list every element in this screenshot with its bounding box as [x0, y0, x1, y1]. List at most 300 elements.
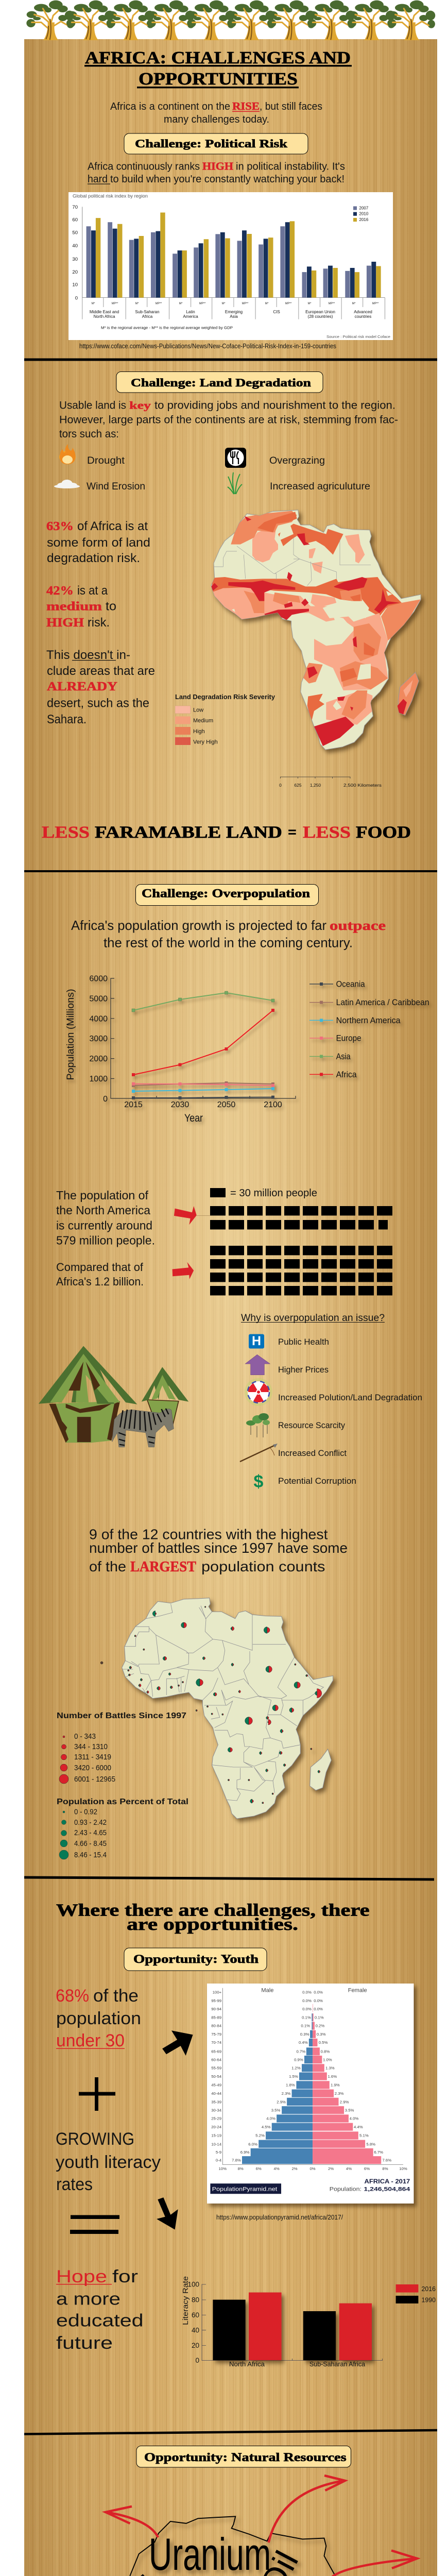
population pyramid chart: 20-24	[211, 2125, 222, 2129]
map legend: land degradation risk severity: Low	[193, 707, 203, 713]
bar chart: global political risk index: 10	[72, 282, 78, 287]
bar chart: global political risk index: MP**	[329, 302, 335, 305]
cape verde dot	[100, 1662, 103, 1664]
title	[84, 48, 352, 89]
label: wind erosion: Wind Erosion	[87, 481, 145, 492]
map scale bar: 1,250	[310, 783, 321, 788]
line chart legend: Europe	[336, 1033, 361, 1043]
population pyramid chart: 0.0%	[314, 1998, 323, 2003]
bar chart: global political risk index: M*	[352, 302, 356, 305]
population pyramid chart: 30-34	[211, 2108, 222, 2112]
political risk text: to build when you're constantly watching your back!	[110, 174, 344, 185]
population pyramid chart: 0%	[309, 2166, 316, 2171]
bar chart: global political risk index: CIS	[273, 310, 280, 314]
bar chart: global political risk index: 20	[72, 269, 78, 275]
bar chart: global political risk index: 60	[72, 217, 78, 223]
badge: opportunity youth	[124, 1948, 267, 1971]
bar chart: global political risk index: MP**	[242, 302, 249, 305]
population pyramid chart: 15-19	[211, 2133, 221, 2138]
badge: opportunity youth: Opportunity: Youth	[133, 1953, 259, 1965]
battles and population text: number of battles since 1997 have some	[89, 1540, 348, 1556]
callout: less farmable land = less food: LESS	[303, 823, 351, 842]
youth population text	[56, 1986, 141, 2050]
population pyramid chart: 75-79	[211, 2032, 221, 2037]
map legend: land degradation risk severity	[175, 693, 275, 745]
pictogram: north america population	[210, 1206, 392, 1229]
bar chart: global political risk index: 2007	[359, 206, 369, 210]
population pyramid chart: 7.6%	[382, 2158, 391, 2162]
line chart legend: Northern America	[336, 1015, 401, 1025]
bar chart: global political risk index: MP**	[199, 302, 206, 305]
population pyramid chart: 1.6%	[328, 2074, 337, 2079]
label: potential corruption: Potential Corruption	[278, 1476, 356, 1486]
battles and population text: 9 of the 12 countries with the highest	[89, 1526, 328, 1542]
population pyramid chart: 90-94	[211, 2007, 222, 2011]
political risk text: hard	[88, 174, 108, 185]
population pyramid chart: 55-59	[211, 2066, 221, 2071]
population pyramid chart: 0.0%	[302, 1998, 312, 2003]
population pyramid chart: 5.2%	[255, 2133, 265, 2138]
population pyramid chart: 1.3%	[325, 2066, 335, 2071]
map legend: land degradation risk severity: Medium	[193, 718, 213, 724]
icon: resource scarcity trees	[246, 1413, 270, 1437]
badge: challenge overpopulation: Challenge: Overpopulation	[142, 887, 310, 900]
bar chart: global political risk index: Source : Political risk model Coface	[326, 334, 390, 339]
icon: fork and knife	[225, 448, 246, 468]
plus sign	[79, 2077, 115, 2111]
line chart: population projections: 4000	[89, 1015, 108, 1023]
line chart: population projections: Population (Millions)	[65, 989, 76, 1080]
line chart legend: Latin America / Caribbean	[336, 997, 429, 1007]
zebra	[112, 1409, 174, 1447]
growing literacy text: youth literacy	[56, 2153, 161, 2172]
battles and population text: LARGEST	[130, 1559, 196, 1575]
bar chart: global political risk index: Emerging	[225, 310, 243, 314]
source url: https://www.coface.com/News-Publications/News/New-Coface-Political-Risk-Index-in-159-countries	[79, 342, 336, 350]
population pyramid chart: 35-39	[211, 2100, 221, 2105]
legend: number of battles: 6001 - 12965	[74, 1775, 115, 1784]
population pyramid chart: 1,246,504,864	[364, 2186, 410, 2192]
arrow: to africa pictogram	[173, 1262, 194, 1279]
population pyramid chart: 1.5%	[289, 2074, 298, 2079]
label: increased agriculture: Increased agriculuture	[270, 481, 370, 492]
population pyramid chart: 2%	[328, 2166, 334, 2171]
bar chart: global political risk index: countries	[355, 314, 371, 319]
growing literacy text: GROWING	[56, 2129, 134, 2149]
bar chart: global political risk index: 40	[72, 243, 78, 249]
bar chart: global political risk index: Asia	[230, 314, 238, 319]
badge: opportunity natural resources: Opportunity: Natural Resources	[144, 2451, 347, 2464]
bar chart: global political risk index: 30	[72, 257, 78, 262]
population pyramid chart: 5.8%	[366, 2142, 375, 2146]
population pyramid chart: 45-49	[211, 2083, 221, 2088]
land degradation statistics: This doesn't in-	[46, 648, 130, 662]
label: increased conflict: Increased Conflict	[278, 1448, 347, 1458]
population pyramid chart: 0.2%	[316, 2024, 324, 2028]
hope text: Hope	[56, 2267, 107, 2286]
battles and population text: population counts	[201, 1558, 325, 1574]
population pyramid chart	[207, 1984, 414, 2204]
population pyramid chart: Female	[348, 1988, 367, 1993]
section divider	[24, 870, 437, 872]
line chart: population projections: Year	[184, 1112, 203, 1124]
callout: less farmable land = less food: FARAMABLE LAND	[95, 823, 282, 842]
label: overgrazing: Overgrazing	[269, 455, 325, 466]
bar chart: global political risk index: M*	[222, 302, 226, 305]
map: land degradation risk	[210, 510, 421, 750]
population pyramid chart: 0.5%	[319, 2040, 328, 2045]
population pyramid chart: 70-74	[211, 2040, 222, 2045]
political risk text	[88, 160, 345, 185]
land degradation statistics: of Africa is at	[77, 519, 148, 533]
population comparison text: The population of	[56, 1189, 149, 1202]
bar chart: literacy rate: 100	[187, 2280, 199, 2289]
population pyramid chart: 25-29	[211, 2116, 221, 2121]
population pyramid chart: 0.1%	[315, 2015, 324, 2020]
population pyramid chart: 10%	[219, 2166, 227, 2171]
youth population text: under 30	[56, 2031, 125, 2050]
land degradation statistics: to	[106, 600, 116, 613]
population pyramid chart: 2.3%	[282, 2091, 291, 2096]
hope text	[56, 2267, 144, 2353]
line chart: population projections: 1000	[89, 1075, 108, 1083]
battles and population text	[89, 1526, 348, 1575]
bar chart: global political risk index: America	[183, 314, 198, 319]
literacy chart legend: 2016	[421, 2285, 436, 2293]
bar chart: global political risk index: Global political risk index by region	[73, 193, 148, 199]
land degradation statistics: ALREADY	[47, 680, 117, 693]
bar chart: global political risk index: Latin	[186, 310, 195, 314]
line chart: population projections: 2050	[217, 1100, 235, 1109]
population comparison text: Africa's 1.2 billion.	[56, 1275, 144, 1288]
icon: public health: H	[252, 1334, 261, 1348]
bar chart: global political risk index: M*	[265, 302, 269, 305]
bar chart: global political risk index: 0	[75, 296, 78, 301]
population pyramid chart: 6.9%	[240, 2150, 250, 2155]
population pyramid chart: 0.4%	[299, 2040, 308, 2045]
bar chart: global political risk index: MP**	[372, 302, 379, 305]
bar chart: global political risk index: 50	[72, 230, 78, 236]
bar chart: global political risk index: North Africa	[94, 314, 115, 319]
bar chart: literacy rate	[181, 2276, 382, 2368]
label: increased pollution: Increased Polution/Land Degradation	[278, 1393, 422, 1402]
heading: where there are challenges	[56, 1901, 370, 1934]
literacy chart legend: 1990	[421, 2296, 436, 2304]
population pyramid chart: 4%	[274, 2166, 280, 2171]
land degradation text: Usable land is	[59, 400, 126, 411]
line chart legend: Oceania	[336, 979, 365, 989]
badge: challenge overpopulation	[136, 884, 318, 906]
label: public health: Public Health	[278, 1337, 329, 1347]
population pyramid chart: 0.0%	[302, 1990, 312, 1995]
legend: population percent of total: 8.46 - 15.4	[74, 1851, 107, 1859]
equals sign	[70, 2215, 119, 2234]
population pyramid chart: 8%	[238, 2166, 244, 2171]
land degradation statistics: some form of land	[47, 536, 150, 550]
intro text: RISE	[232, 100, 260, 112]
illustration: huts and zebra	[39, 1346, 188, 1447]
bar chart: literacy rate: North Africa	[229, 2360, 265, 2368]
map scale bar: 0	[279, 783, 282, 788]
red arrow: northwest	[106, 2506, 158, 2537]
heading: why is overpopulation an issue: Why is overpopulation an issue?	[241, 1313, 385, 1324]
bar chart: global political risk index: M*	[135, 302, 139, 305]
bar chart: literacy rate: 80	[192, 2296, 199, 2304]
population comparison text	[56, 1189, 155, 1288]
land degradation statistics: degradation risk.	[47, 551, 140, 565]
bar chart: global political risk index: Sub-Saharan	[135, 310, 160, 314]
overpopulation text: outpace	[330, 918, 386, 933]
population pyramid chart: 3.5%	[345, 2108, 354, 2112]
population pyramid chart: 2.9%	[340, 2100, 349, 2105]
population pyramid chart: 5-9	[216, 2150, 221, 2155]
map scale bar: 625	[294, 783, 302, 788]
bar chart: literacy rate: 40	[192, 2327, 199, 2334]
population pyramid chart: 0.0%	[314, 1990, 323, 1995]
map legend: land degradation risk severity: Land Degradation Risk Severity	[175, 693, 275, 701]
bar chart: global political risk index: MP**	[285, 302, 292, 305]
population comparison text: is currently around	[56, 1218, 152, 1232]
population pyramid chart: 0-4	[216, 2158, 222, 2162]
land degradation statistics: 63%	[46, 520, 74, 533]
line chart: population projections: 2030	[171, 1100, 189, 1109]
hope text: a more	[56, 2290, 120, 2309]
population pyramid chart: 40-44	[211, 2091, 222, 2096]
population pyramid chart: 4.0%	[350, 2116, 358, 2121]
literacy chart legend	[396, 2284, 436, 2304]
population pyramid chart: 80-84	[211, 2024, 222, 2028]
population pyramid chart: 1.0%	[323, 2057, 332, 2062]
youth population text: of the	[93, 1986, 139, 2006]
title: OPPORTUNITIES	[139, 70, 298, 89]
population pyramid chart: 95-99	[211, 1998, 221, 2003]
land degradation text: However, large parts of the continents are at risk, stemming from fac-	[59, 414, 398, 426]
youth population text: population	[56, 2009, 141, 2028]
bar chart: global political risk index: M*	[308, 302, 312, 305]
population pyramid chart: 0.1%	[301, 2024, 310, 2028]
population pyramid chart: 0.7%	[297, 2049, 305, 2054]
land degradation statistics: medium	[46, 600, 102, 613]
map legend: land degradation risk severity: High	[193, 728, 205, 735]
pyramid source url: https://www.populationpyramid.net/africa/2017/	[216, 2213, 343, 2221]
battles and population text: of the	[89, 1558, 126, 1574]
population pyramid chart: AFRICA - 2017	[364, 2178, 410, 2185]
map scale bar	[279, 777, 382, 788]
line chart: population projections: 2100	[264, 1100, 282, 1109]
political risk text: Africa continuously ranks	[88, 161, 200, 172]
bar chart: global political risk index: MP**	[112, 302, 118, 305]
callout: less farmable land = less food: FOOD	[356, 823, 411, 842]
icon: grass	[228, 472, 242, 494]
population pyramid chart: Population:	[330, 2186, 361, 2192]
arrow: up right to pyramid	[162, 2030, 193, 2056]
population pyramid chart: 1.9%	[331, 2083, 340, 2088]
legend: number of battles	[57, 1711, 186, 1784]
population pyramid chart: 0.8%	[321, 2049, 330, 2054]
line chart: population projections: 0	[103, 1095, 108, 1104]
population pyramid chart: 0.0%	[302, 2007, 312, 2011]
population pyramid chart: 10-14	[211, 2142, 222, 2146]
line chart legend: Africa	[336, 1070, 357, 1079]
youth population text: 68%	[56, 1986, 89, 2006]
bar chart: global political risk index: Advanced	[354, 310, 372, 314]
population pyramid chart: 2.9%	[277, 2100, 286, 2105]
overpopulation text	[71, 918, 386, 950]
bar chart: literacy rate: Sub-Saharan Africa	[309, 2360, 366, 2368]
population pyramid chart: 10%	[399, 2166, 407, 2171]
population pyramid chart: 0.3%	[300, 2032, 309, 2037]
badge: challenge land degradation	[116, 372, 323, 393]
icon: dollar sign: $	[254, 1472, 264, 1492]
intro text: many challenges today.	[164, 114, 269, 125]
section divider	[24, 359, 437, 361]
land degradation text	[59, 399, 398, 440]
political risk text: in political instability. It's	[236, 161, 345, 172]
population pyramid chart: 0.9%	[294, 2057, 303, 2062]
bar chart: literacy rate: 20	[192, 2342, 199, 2349]
bar chart: global political risk index: 2010	[359, 211, 369, 216]
legend: population percent of total: 4.66 - 8.45	[74, 1839, 107, 1848]
pictogram: africa population	[210, 1246, 392, 1295]
population pyramid chart: 6.7%	[374, 2150, 383, 2155]
population pyramid chart: 50-54	[211, 2074, 222, 2079]
label: drought: Drought	[87, 455, 125, 466]
population pyramid chart: 8%	[382, 2166, 388, 2171]
heading: where there are challenges: Where there are challenges, there	[56, 1901, 370, 1920]
red arrow: east	[331, 2550, 417, 2576]
intro text	[110, 100, 322, 125]
population pyramid chart: 6%	[364, 2166, 370, 2171]
population pyramid chart: 4.4%	[354, 2125, 363, 2129]
land degradation statistics: is at a	[77, 584, 108, 598]
red arrow: northeast	[269, 2476, 345, 2543]
intro text: , but still faces	[260, 101, 322, 112]
line chart: population projections: 2015	[124, 1100, 143, 1109]
population pyramid chart: 0.3%	[317, 2032, 326, 2037]
arrow: to north america pictogram	[174, 1206, 210, 1225]
section divider	[24, 1877, 434, 1879]
line chart: population projections: 3000	[89, 1035, 108, 1043]
label: resource scarcity: Resource Scarcity	[278, 1420, 345, 1430]
icon: pollution radiation symbol	[245, 1378, 272, 1406]
land degradation text: to providing jobs and nourishment to the region.	[154, 400, 395, 411]
population pyramid chart: 100+	[213, 1990, 222, 1995]
legend: number of battles: Number of Battles Since 1997	[57, 1711, 186, 1720]
arrow: down right to literacy chart	[157, 2197, 178, 2230]
population pyramid chart: 85-89	[211, 2015, 221, 2020]
population pyramid chart: 65-69	[211, 2049, 221, 2054]
label: higher prices: Higher Prices	[278, 1365, 329, 1375]
legend: population percent of total	[57, 1798, 188, 1859]
icon: spear	[240, 1444, 278, 1462]
land degradation statistics: risk.	[88, 616, 110, 630]
population comparison text: 579 million people.	[56, 1233, 155, 1247]
bar chart: literacy rate: 60	[192, 2311, 199, 2319]
population pyramid chart: 7.8%	[232, 2158, 241, 2162]
bar chart: global political risk index	[68, 192, 393, 340]
legend: number of battles: 3420 - 6000	[74, 1764, 111, 1772]
callout: less farmable land = less food: LESS	[42, 823, 90, 842]
population pyramid chart: 6.0%	[248, 2142, 257, 2146]
overpopulation text: the rest of the world in the coming century.	[104, 935, 353, 950]
pictogram key: = 30 million people	[230, 1188, 317, 1199]
tree row banner	[26, 1, 435, 40]
line chart legend	[309, 979, 429, 1079]
section divider	[24, 2430, 437, 2434]
bar chart: global political risk index: 2016	[359, 217, 369, 222]
line chart: population projections	[65, 975, 296, 1124]
heading: where there are challenges: are opportunities.	[127, 1915, 298, 1934]
population pyramid chart: 60-64	[211, 2057, 222, 2062]
growing literacy text: rates	[56, 2175, 93, 2194]
population pyramid chart: 4.0%	[266, 2116, 275, 2121]
bar chart: global political risk index: 70	[72, 205, 78, 210]
population pyramid chart: 2%	[291, 2166, 298, 2171]
callout: less farmable land = less food	[42, 823, 411, 842]
land degradation statistics: desert, such as the	[47, 697, 149, 710]
map scale bar: 2,500 Kilometers	[343, 783, 382, 788]
legend: population percent of total: 0 - 0.92	[74, 1808, 97, 1817]
bar chart: global political risk index: M*	[179, 302, 183, 305]
population pyramid chart: 6%	[256, 2166, 262, 2171]
icon: higher prices arrow	[245, 1354, 270, 1375]
legend: number of battles: 0 - 343	[74, 1732, 96, 1741]
overpopulation text: Africa's population growth is projected to far	[71, 918, 326, 933]
badge: opportunity natural resources	[136, 2446, 351, 2467]
population pyramid chart: 0.1%	[302, 2015, 311, 2020]
line chart: population projections: 5000	[89, 994, 108, 1004]
land degradation statistics: 42%	[46, 584, 74, 598]
legend: number of battles: 344 - 1310	[74, 1742, 108, 1751]
land degradation text: tors such as:	[59, 428, 119, 440]
legend: population percent of total: 2.43 - 4.65	[74, 1828, 107, 1837]
legend: number of battles: 1311 - 3419	[74, 1753, 111, 1761]
legend: population percent of total: 0.93 - 2.42	[74, 1818, 107, 1827]
population pyramid chart: 0.0%	[314, 2007, 323, 2011]
land degradation statistics	[46, 519, 155, 726]
bar chart: global political risk index: M*	[92, 302, 95, 305]
callout: less farmable land = less food: =	[288, 823, 297, 842]
title: AFRICA: CHALLENGES AND	[85, 48, 351, 67]
legend: population percent of total: Population as Percent of Total	[57, 1798, 188, 1806]
line chart: population projections: 2000	[89, 1055, 108, 1063]
map legend: land degradation risk severity: Very High	[193, 739, 218, 745]
land degradation statistics: Sahara.	[47, 713, 87, 726]
intro text: Africa is a continent on the	[110, 101, 230, 112]
icon: public health	[249, 1334, 264, 1349]
word map: natural resources africa	[130, 2516, 356, 2576]
population pyramid chart: 1.2%	[291, 2066, 301, 2071]
land degradation statistics: clude areas that are	[47, 664, 155, 678]
population comparison text: Compared that of	[56, 1261, 144, 1274]
political risk text: HIGH	[202, 160, 233, 172]
icon: cloud wind erosion	[54, 480, 80, 488]
population pyramid chart: 1.8%	[286, 2083, 295, 2088]
bar chart: literacy rate: 0	[195, 2357, 199, 2364]
population pyramid chart: PopulationPyramid.net	[212, 2186, 278, 2192]
bar chart: global political risk index: MP**	[156, 302, 162, 305]
population pyramid chart: 4.5%	[262, 2125, 271, 2129]
bar chart: global political risk index: Middle East and	[90, 310, 119, 314]
badge: challenge political risk	[124, 133, 308, 154]
bar chart: literacy rate: Literacy Rate	[181, 2276, 190, 2325]
growing literacy text	[56, 2129, 161, 2194]
hope text: educated	[56, 2311, 144, 2331]
bar chart: global political risk index: European Union	[305, 310, 335, 314]
icon: drought flame	[59, 444, 76, 464]
land degradation statistics: HIGH	[46, 616, 84, 630]
population pyramid chart: 3.5%	[271, 2108, 281, 2112]
